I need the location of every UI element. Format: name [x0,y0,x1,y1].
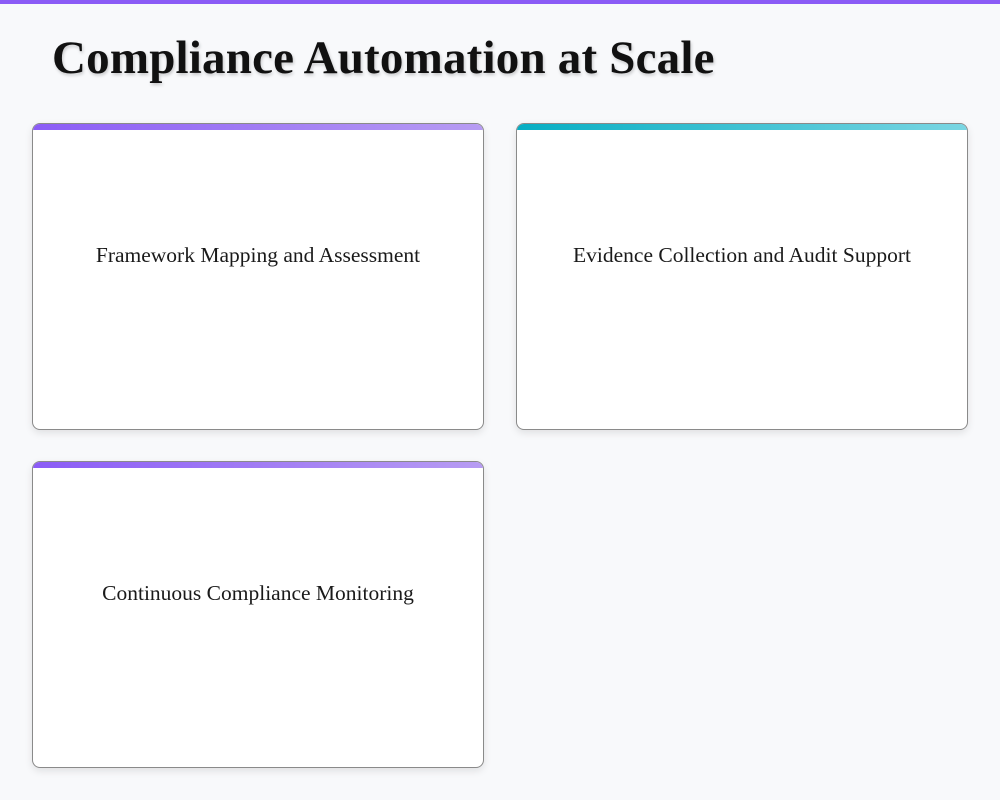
heading: evidence collection: Evidence Collection and Audit Support [573,243,911,267]
panel: evidence collection [516,123,968,430]
title: Compliance Automation at Scale [52,32,715,84]
heading: continuous monitoring: Continuous Compliance Monitoring [102,581,414,605]
accent bar: purple [33,124,483,130]
panel: continuous monitoring [32,461,484,768]
accent bar: purple [33,462,483,468]
top accent bar [0,0,1000,4]
panel: framework mapping [32,123,484,430]
heading: framework mapping: Framework Mapping and Assessment [96,243,420,267]
accent bar: cyan [517,124,967,130]
